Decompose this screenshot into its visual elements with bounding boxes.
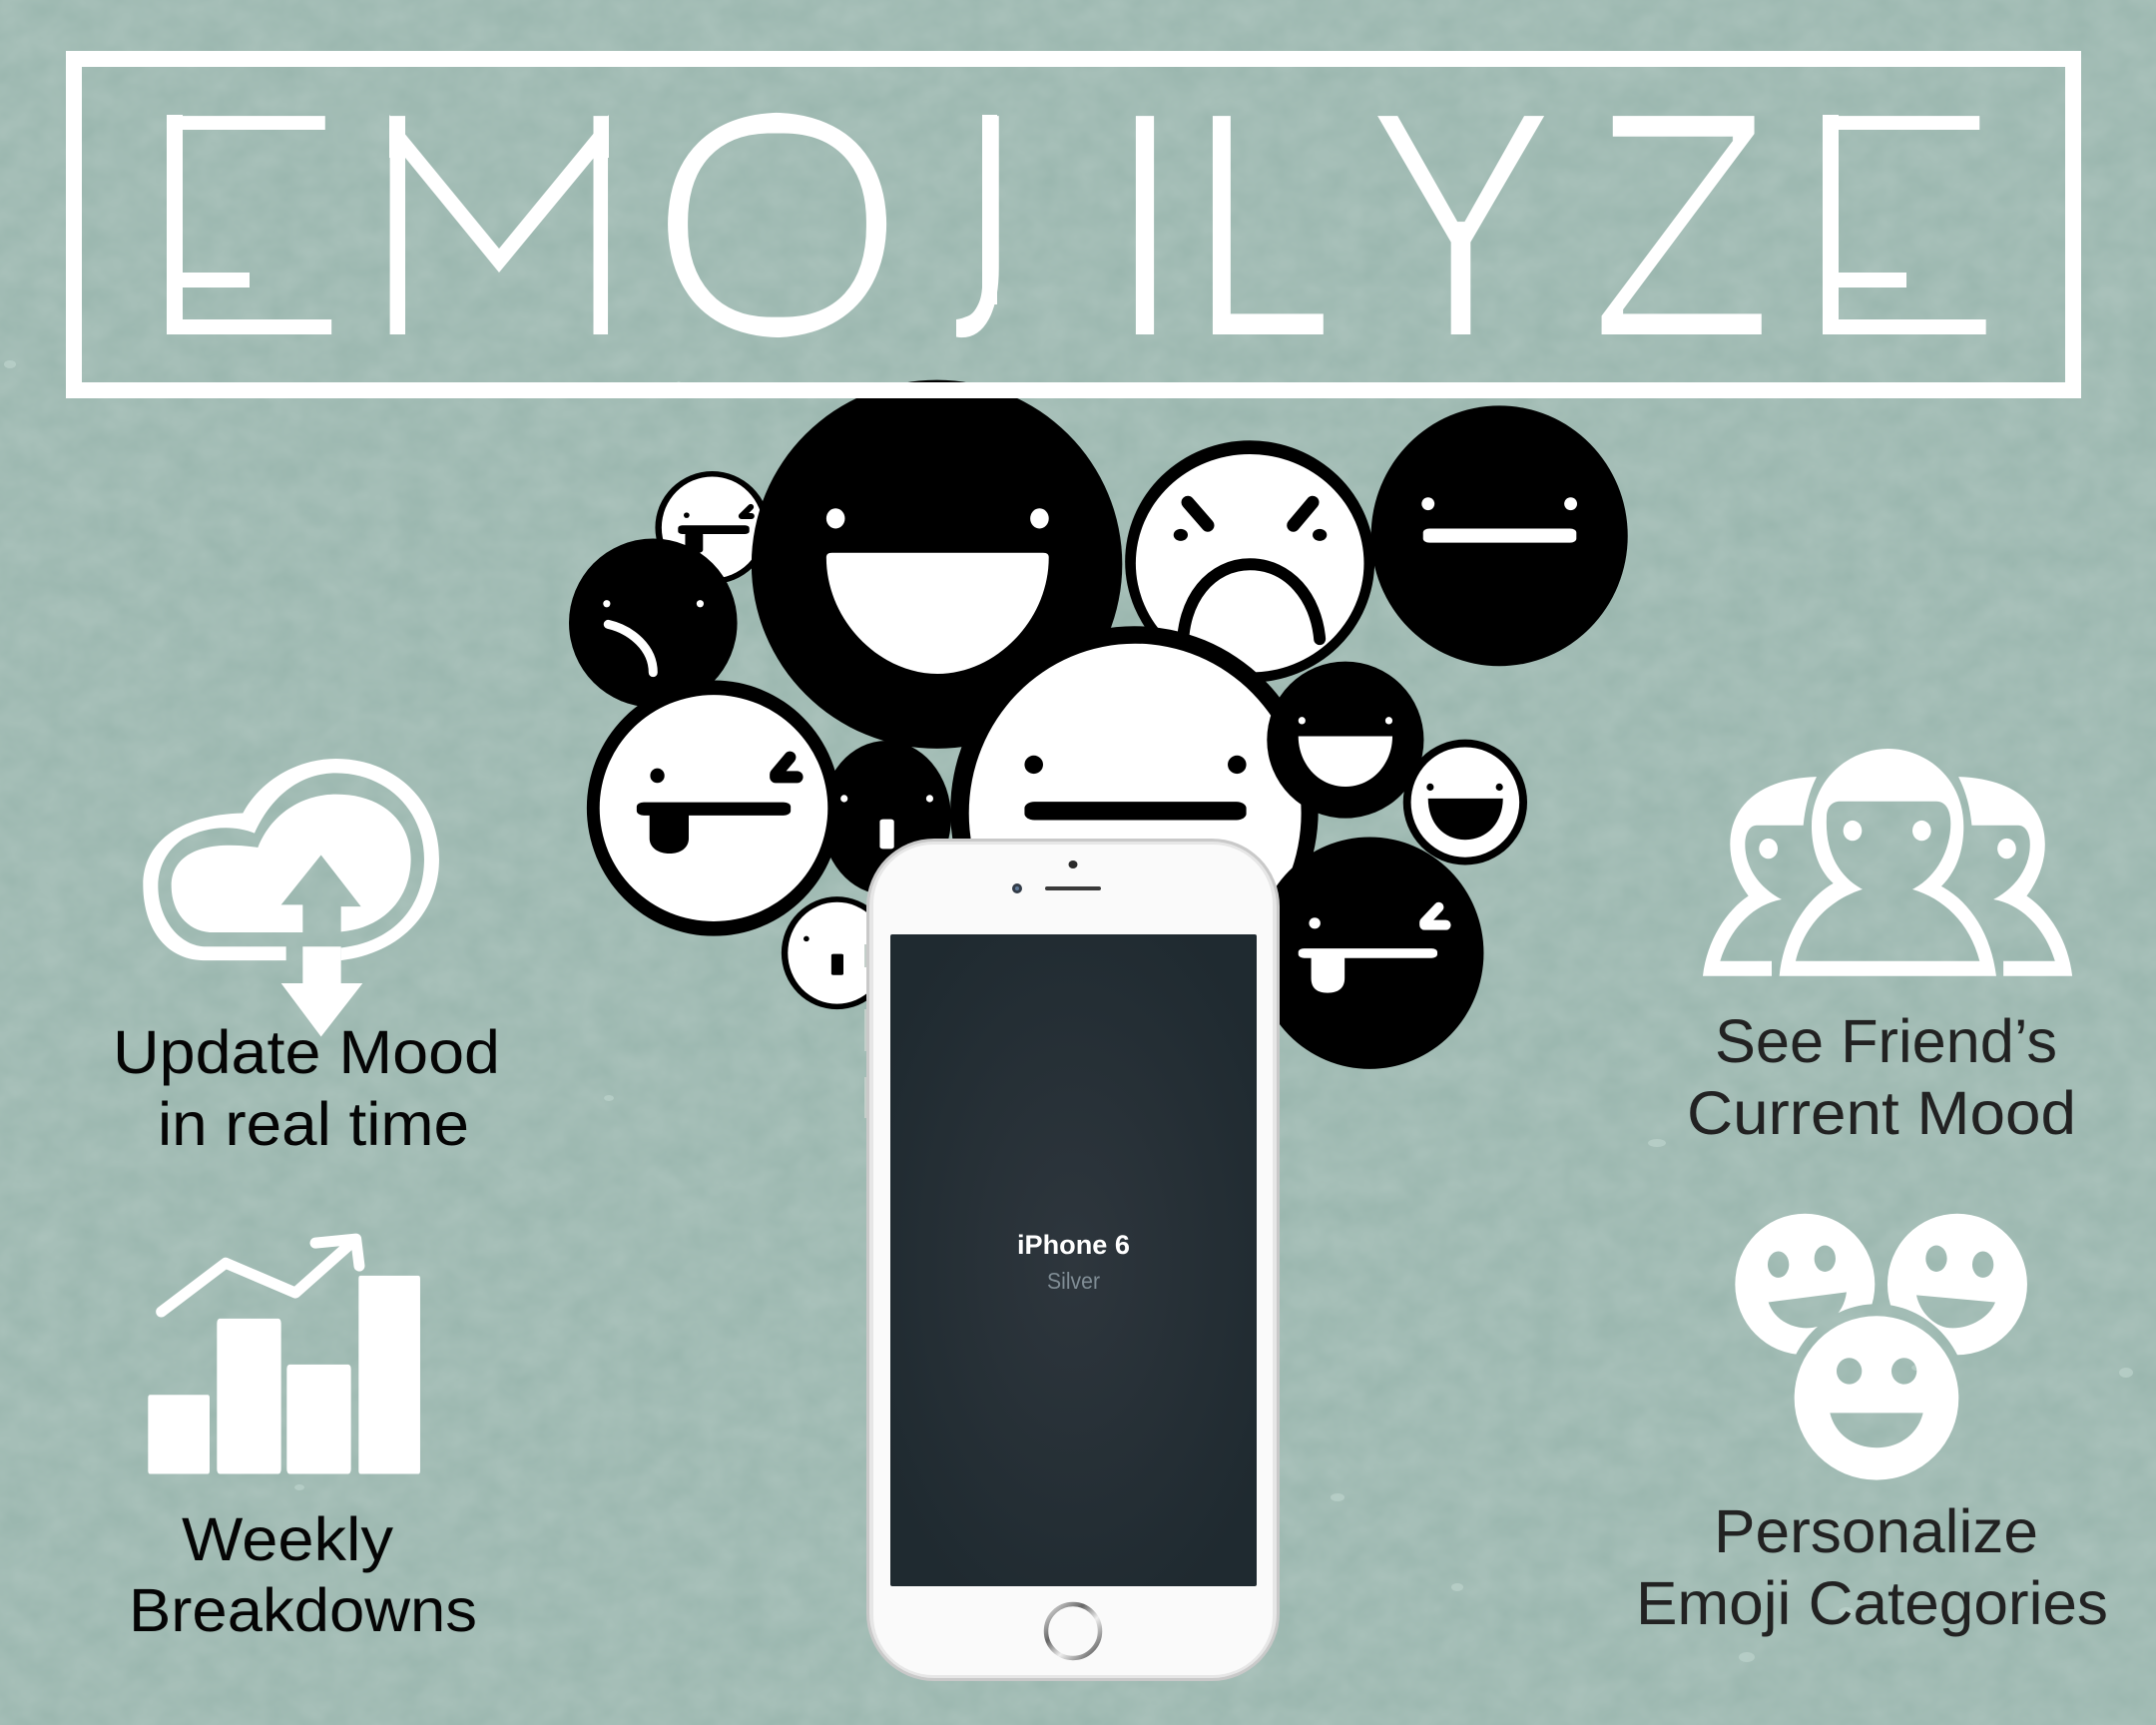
right figure [1958,777,2072,976]
title: EMOJILYZE: Z [1586,44,1778,405]
left figure [1703,777,1817,976]
phone side buttons [864,944,867,1118]
emoji: small black grin [1267,662,1423,819]
icon: bar chart with arrow [148,1239,420,1473]
title: EMOJILYZE: M [357,44,641,405]
title: EMOJILYZE: O [646,45,908,405]
text: see friends mood [1687,1007,2076,1147]
emoji: big white neutral [950,626,1319,994]
emoji: white angry [1125,440,1374,683]
emoji: small white bottom [782,896,892,1009]
text: update mood: Update Mood [113,1018,500,1086]
left smiley [1735,1214,1875,1355]
text: weekly breakdowns: Weekly [182,1505,394,1573]
title: EMOJILYZE [138,43,2004,406]
title: EMOJILYZE: J [921,43,1013,405]
title frame [74,59,2073,390]
text: personalize categories: Personalize [1714,1497,2038,1565]
emoji: small white grin [1403,740,1527,864]
phone screen label: iPhone 6 [1017,1230,1130,1260]
emoji: small black behind [821,741,951,894]
text: update mood: in real time [158,1090,469,1158]
icon: three smileys [1735,1214,2027,1480]
icon: cloud sync [143,759,439,1036]
right smiley [1887,1214,2027,1355]
text: personalize categories [1636,1497,2108,1637]
title: EMOJILYZE: E [138,45,350,406]
phone home button [1046,1604,1100,1658]
text: weekly breakdowns: Breakdowns [129,1576,477,1644]
phone screen label: Silver [1047,1268,1100,1294]
phone screen label [1017,1230,1130,1294]
title: EMOJILYZE: E [1793,45,2004,406]
text: update mood [113,1018,500,1158]
emoji: big black laughing [752,380,1122,749]
emoji: small white wink [655,471,770,584]
emoji: black sad [569,539,738,708]
text: weekly breakdowns [129,1505,477,1644]
text: see friends mood: Current Mood [1687,1079,2076,1147]
emoji: black neutral [1371,405,1628,666]
emoji cluster [569,380,1628,1069]
icon: friends group [1703,749,2072,976]
emoji: white wink with tongue [587,680,840,936]
title: EMOJILYZE: L [1188,44,1336,405]
phone sensor, camera and speaker [1012,861,1101,893]
center smiley [1795,1316,1958,1480]
text: personalize categories: Emoji Categories [1636,1569,2108,1637]
title: EMOJILYZE: Y [1365,44,1556,405]
phone screen [890,934,1257,1586]
phone [864,839,1280,1681]
phone body [866,839,1280,1681]
text: see friends mood: See Friend’s [1715,1007,2057,1075]
center figure [1780,749,1996,976]
emoji: black wink lower right [1256,837,1483,1069]
title: EMOJILYZE: I [1100,44,1190,405]
